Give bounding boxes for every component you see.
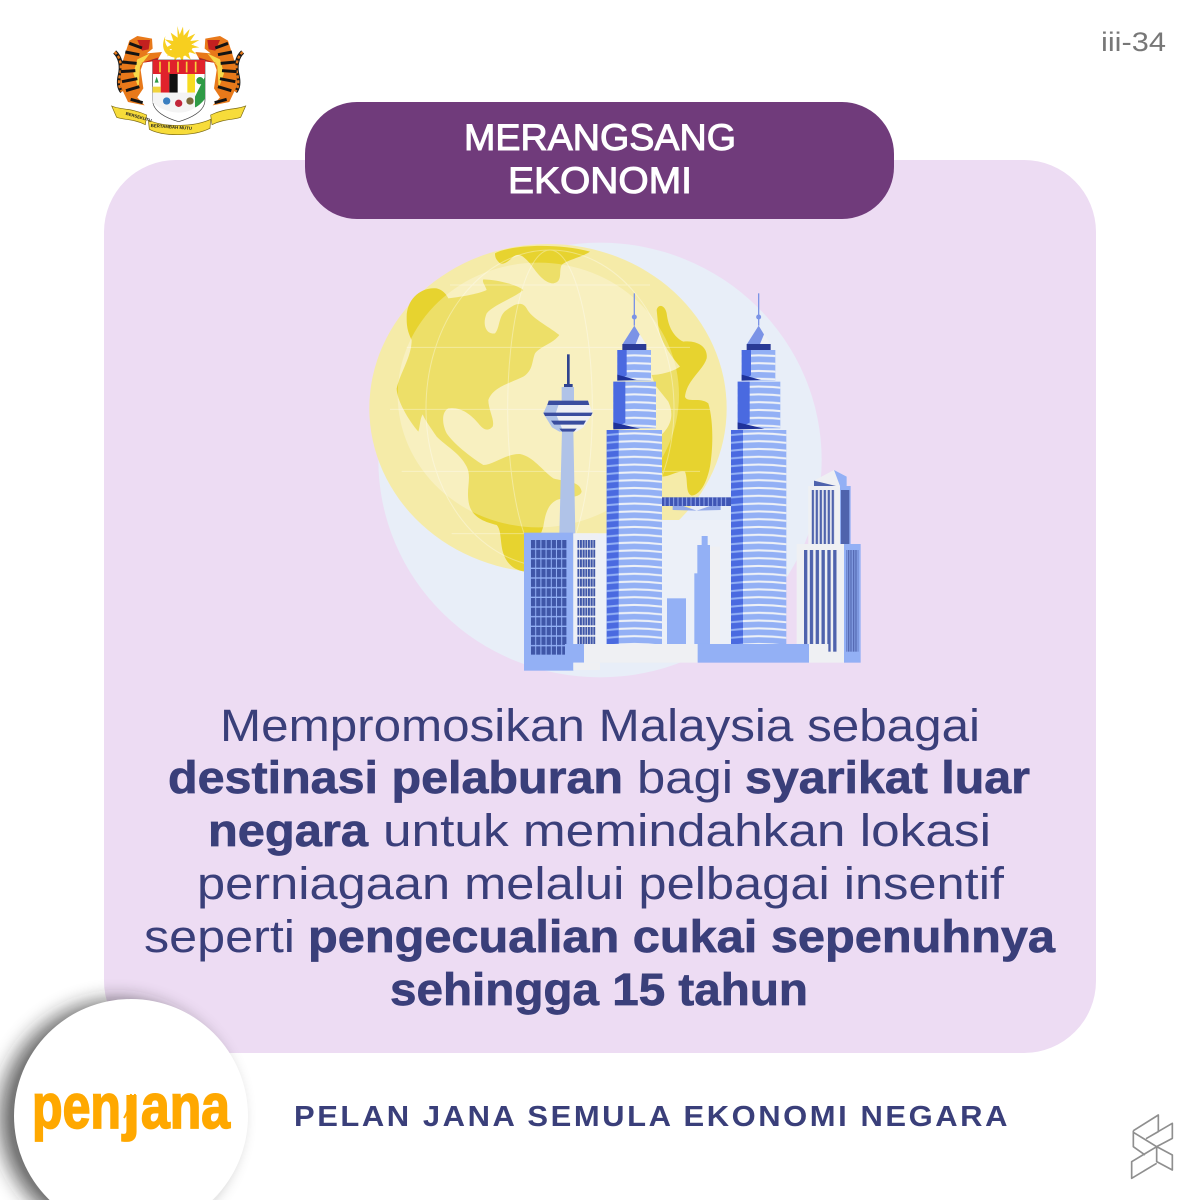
KL Tower — [543, 354, 593, 534]
body text: sehingga 15 tahun — [390, 964, 808, 1015]
icon: Malaysian coat of arms: BERSEKUTU — [125, 111, 152, 123]
small buildings between towers — [667, 536, 710, 644]
body text: syarikat luar — [745, 752, 1030, 803]
body text: perniagaan melalui pelbagai insentif — [197, 858, 1005, 909]
globe — [369, 244, 727, 573]
body text: untuk memindahkan lokasi — [383, 805, 991, 856]
body text — [144, 700, 1056, 1015]
right tiger — [195, 36, 243, 105]
right office building — [797, 470, 861, 663]
podium base — [565, 644, 809, 670]
body text: pengecualian cukai sepenuhnya — [308, 911, 1056, 962]
shield — [153, 60, 205, 122]
icon: Malaysian coat of arms — [112, 26, 246, 135]
motto scroll — [112, 106, 246, 135]
penjana logo badge: ana — [141, 1072, 231, 1142]
penjana logo badge — [0, 999, 248, 1200]
skybridge — [662, 497, 731, 511]
icon: publisher logo — [1132, 1115, 1172, 1178]
body text: Mempromosikan Malaysia sebagai — [220, 700, 980, 751]
body text: destinasi pelaburan — [168, 752, 623, 803]
Petronas tower left — [607, 293, 662, 644]
heading pill — [305, 102, 894, 219]
light backing buildings — [573, 520, 731, 644]
Petronas tower right — [731, 293, 786, 644]
footer tagline: PELAN JANA SEMULA EKONOMI NEGARA — [294, 1101, 1010, 1133]
panel: main lilac card — [104, 160, 1096, 1053]
icon: Malaysian coat of arms: BERTAMBAH MUTU — [151, 123, 192, 131]
left office building — [524, 533, 598, 671]
page number: iii-34 — [1101, 27, 1166, 57]
body text: negara — [208, 805, 369, 856]
heading pill: MERANGSANG — [464, 117, 736, 158]
body text: bagi — [637, 752, 733, 803]
body text: seperti — [144, 911, 295, 962]
penjana logo badge: j — [122, 1072, 140, 1142]
heading pill: EKONOMI — [508, 160, 692, 201]
penjana logo badge: pen — [32, 1072, 121, 1142]
illustration: globe and Kuala Lumpur skyline — [369, 243, 861, 677]
left tiger — [115, 36, 162, 105]
pale blue background circle — [378, 243, 822, 677]
